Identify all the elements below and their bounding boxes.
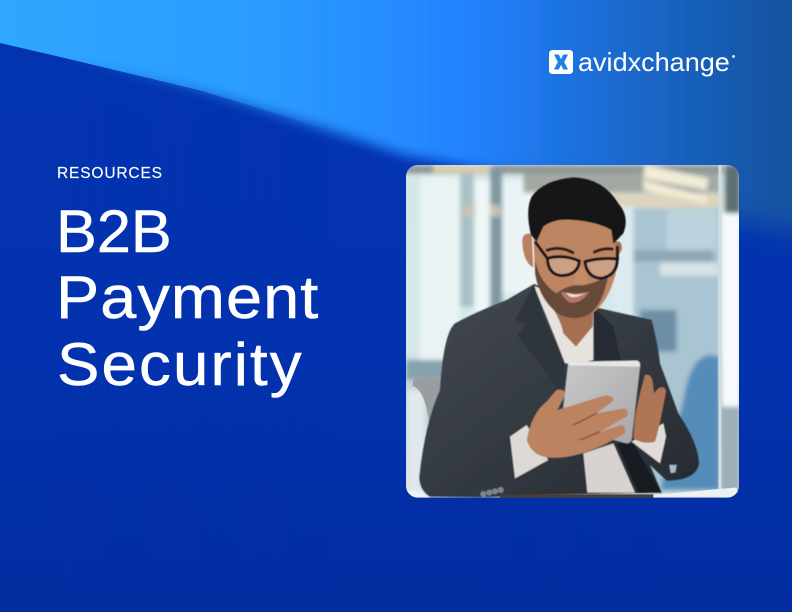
tablet (563, 361, 640, 443)
title (56, 198, 319, 398)
chair (412, 378, 441, 423)
photo: man in suit using a tablet (406, 165, 739, 498)
neck (547, 300, 593, 347)
face (533, 220, 618, 318)
beard (535, 260, 608, 318)
hair (528, 177, 626, 244)
icon: logo mark (549, 50, 573, 74)
ear (522, 234, 533, 267)
jacket (419, 284, 699, 497)
glasses (535, 242, 617, 278)
title: Payment (56, 264, 319, 331)
title: Security (57, 331, 304, 398)
logo wordmark: avidxchange (578, 47, 729, 77)
far hand (633, 375, 666, 443)
smile (561, 292, 589, 303)
nose (576, 268, 586, 286)
lapels (516, 285, 564, 372)
title: B2B (56, 198, 172, 265)
desk (406, 487, 739, 498)
registered mark dot (732, 55, 735, 58)
office background (406, 165, 740, 498)
near hand (527, 390, 628, 458)
eyebrows (546, 248, 574, 253)
eyebrow: resources: RESOURCES (57, 165, 163, 182)
logo: avidxchange (549, 47, 735, 77)
shirt (534, 286, 593, 363)
person (419, 177, 699, 497)
buttons (480, 487, 504, 497)
